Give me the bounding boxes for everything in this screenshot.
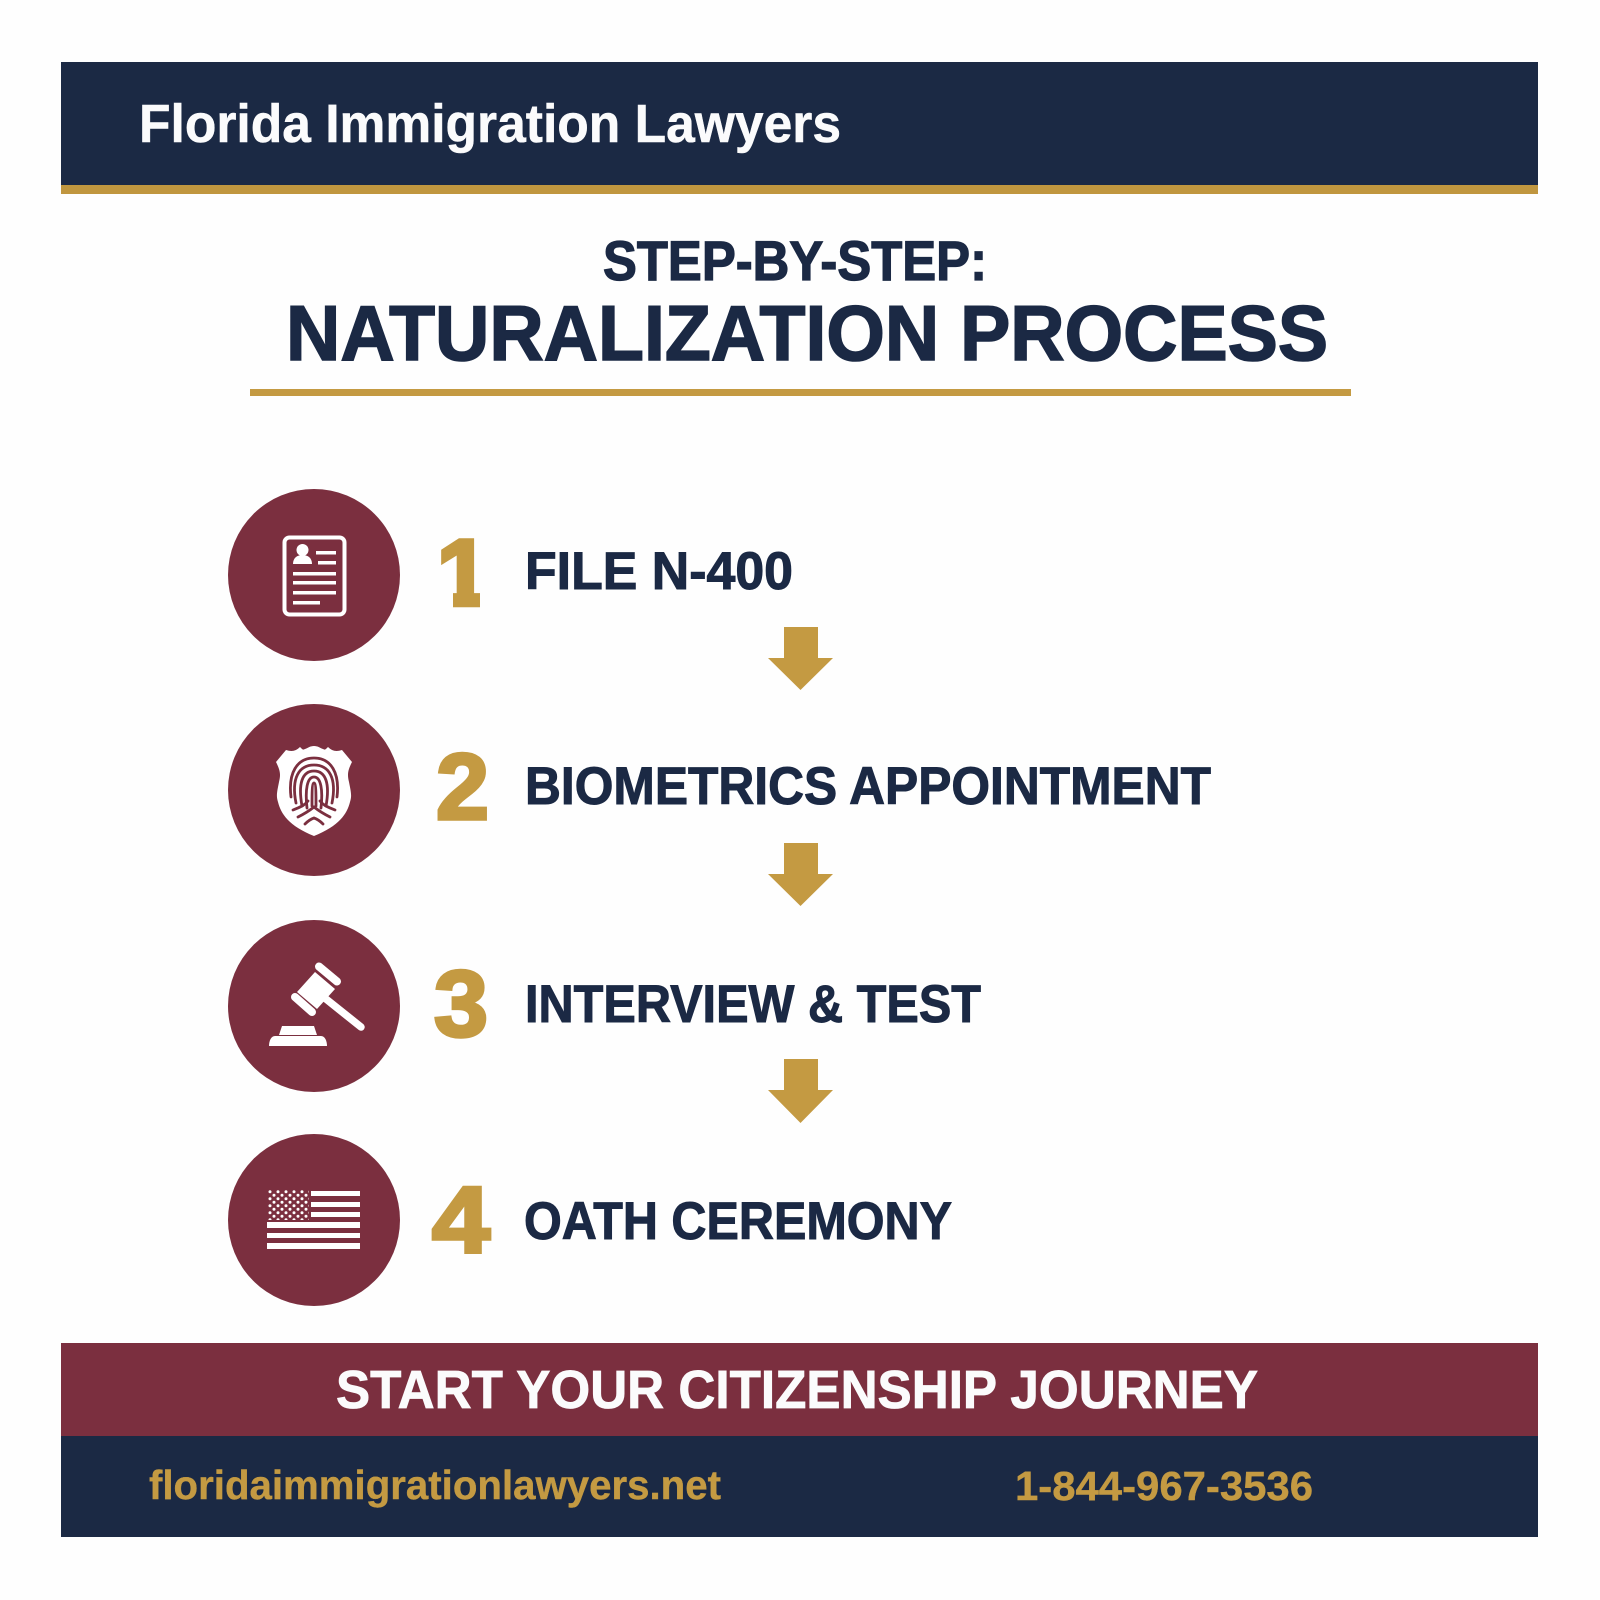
title line two: NATURALIZATION PROCESS	[286, 289, 1328, 377]
icon: American flag	[228, 1134, 400, 1306]
icon: fingerprint shield	[228, 704, 400, 876]
title line one: STEP-BY-STEP:	[603, 229, 987, 292]
website: floridaimmigrationlawyers.net	[149, 1462, 721, 1508]
step 4: oath ceremony	[228, 1134, 952, 1306]
step number 2: 2	[436, 734, 489, 839]
icon: document with ID photo	[228, 489, 400, 661]
step number 4: 4	[432, 1167, 490, 1272]
step number 3: 3	[434, 951, 488, 1056]
contact footer	[61, 1436, 1538, 1537]
step 3: interview and test	[228, 920, 981, 1092]
step label 4: OATH CEREMONY	[524, 1192, 952, 1251]
phone number: 1-844-967-3536	[1015, 1463, 1313, 1509]
arrow 2	[768, 843, 833, 906]
header firm name: Florida Immigration Lawyers	[139, 94, 841, 154]
title underline	[250, 389, 1351, 396]
step label 1: FILE N-400	[525, 542, 793, 601]
step 1: file N-400	[228, 489, 793, 661]
step label 3: INTERVIEW & TEST	[525, 975, 981, 1034]
arrow 3	[768, 1059, 833, 1123]
arrow 1	[768, 627, 833, 690]
header banner	[61, 62, 1538, 194]
step 2: biometrics appointment	[228, 704, 1211, 876]
call-to-action banner	[61, 1343, 1538, 1436]
step number 1: 1	[437, 520, 489, 625]
title block	[250, 229, 1351, 396]
step label 2: BIOMETRICS APPOINTMENT	[525, 757, 1211, 816]
call-to-action text: START YOUR CITIZENSHIP JOURNEY	[336, 1360, 1258, 1420]
icon: gavel	[228, 920, 400, 1092]
